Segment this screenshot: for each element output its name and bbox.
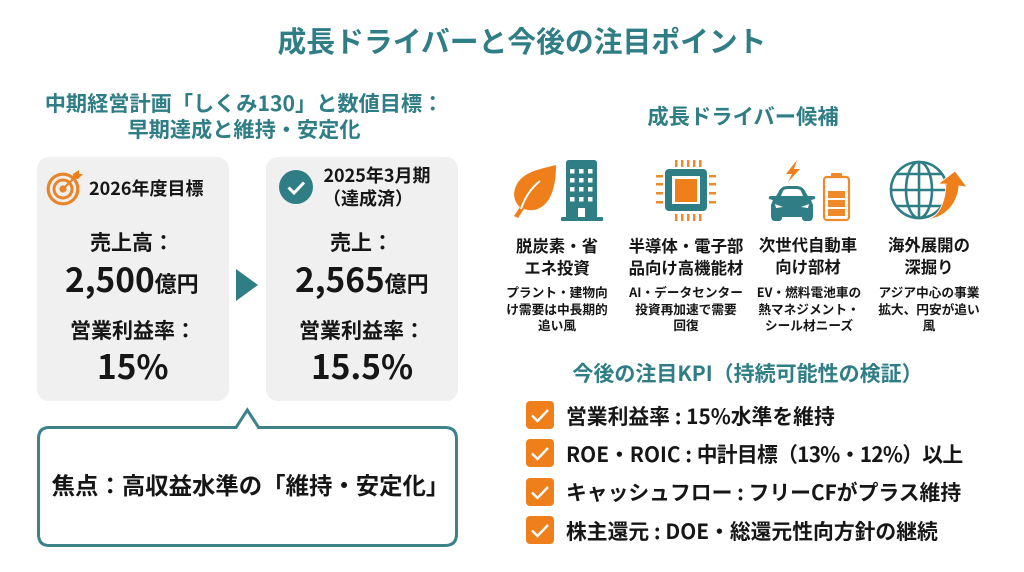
driver description — [878, 282, 980, 334]
value: operating margin: 15.5% — [311, 340, 413, 389]
value: sales: 2,500億円 — [65, 253, 199, 302]
callout outline — [37, 407, 458, 547]
driver title: エネ投資 — [524, 255, 590, 279]
driver description: 回復 — [673, 315, 699, 334]
KPI text: 株主還元 : DOE・総還元性向方針の継続 — [566, 514, 938, 544]
icon: checkbox — [526, 516, 554, 544]
KPI text: キャッシュフロー : フリーCFがプラス維持 — [566, 476, 961, 506]
driver description: 追い風 — [538, 315, 576, 334]
icon: chip — [656, 160, 716, 221]
panel: FY2025 achieved — [266, 157, 458, 401]
callout text: 焦点：高収益水準の「維持・安定化」 — [52, 467, 449, 501]
driver title: 品向け高機能材 — [629, 255, 743, 279]
driver description — [757, 282, 861, 334]
icon: checkbox — [526, 478, 554, 506]
card heading: 2026年度目標 — [89, 175, 203, 201]
card heading: 2025年3月期 — [323, 162, 431, 188]
heading: mid-term plan — [45, 87, 443, 144]
driver title: 脱炭素・省 — [516, 233, 598, 257]
heading: KPIs: 今後の注目KPI（持続可能性の検証） — [572, 358, 923, 388]
driver: decarbonization — [506, 160, 608, 334]
driver title — [516, 233, 598, 279]
driver description: け需要は中長期的 — [506, 298, 608, 318]
icon: checkbox — [526, 401, 554, 429]
label: operating margin: 営業利益率： — [299, 315, 425, 345]
KPI: operating margin — [526, 400, 835, 430]
card heading — [323, 162, 431, 211]
driver description: 拡大、円安が追い — [878, 298, 980, 318]
icon: check circle — [279, 170, 313, 204]
driver description: シール材ニーズ — [765, 315, 853, 334]
icon: checkbox — [526, 439, 554, 467]
driver description: プラント・建物向 — [506, 282, 608, 301]
panel: FY2026 target — [37, 157, 229, 401]
driver: semiconductors — [629, 160, 743, 334]
KPI: ROE and ROIC — [526, 438, 962, 468]
heading: mid-term plan: 中期経営計画「しくみ130」と数値目標： — [45, 87, 443, 118]
icon: leaf and building — [514, 160, 603, 221]
driver description: 投資再加速で需要 — [635, 298, 737, 318]
label: operating margin: 営業利益率： — [70, 315, 196, 345]
card heading: （達成済） — [323, 185, 413, 211]
icon: car and battery — [768, 160, 850, 222]
driver description: EV・燃料電池車の — [757, 282, 861, 301]
driver title: 次世代自動車 — [759, 232, 857, 256]
driver title — [759, 232, 857, 278]
driver description — [506, 282, 608, 334]
value: operating margin: 15% — [97, 340, 169, 389]
driver title: 向け部材 — [775, 254, 841, 278]
value: sales: 2,565億円 — [295, 253, 429, 302]
label: sales: 売上： — [330, 227, 393, 257]
heading: mid-term plan: 早期達成と維持・安定化 — [127, 113, 361, 144]
driver title: 半導体・電子部 — [629, 233, 743, 257]
label: sales: 売上高： — [90, 227, 174, 257]
driver description: アジア中心の事業 — [878, 282, 980, 301]
title: 成長ドライバーと今後の注目ポイント — [278, 20, 766, 61]
icon: globe with arrow — [890, 160, 966, 220]
arrow: target to achieved — [236, 269, 258, 301]
driver title: 海外展開の — [888, 232, 970, 256]
callout — [37, 407, 458, 547]
driver: next-gen vehicles — [757, 160, 861, 334]
driver description: 風 — [923, 315, 935, 334]
KPI text: 営業利益率 : 15%水準を維持 — [566, 400, 835, 430]
heading: growth drivers: 成長ドライバー候補 — [647, 100, 839, 131]
KPI: shareholder returns — [526, 514, 938, 544]
driver description: 熱マネジメント・ — [758, 298, 860, 318]
icon: target — [46, 170, 83, 206]
KPI: cash flow — [526, 476, 961, 506]
driver description: AI・データセンター — [629, 282, 743, 301]
driver title — [629, 233, 743, 279]
driver title: 深掘り — [904, 254, 954, 278]
driver title — [888, 232, 970, 278]
driver: overseas expansion — [878, 160, 980, 334]
KPI list — [526, 400, 962, 544]
KPI text: ROE・ROIC : 中計目標（13%・12%）以上 — [566, 438, 962, 468]
driver description — [629, 282, 743, 334]
